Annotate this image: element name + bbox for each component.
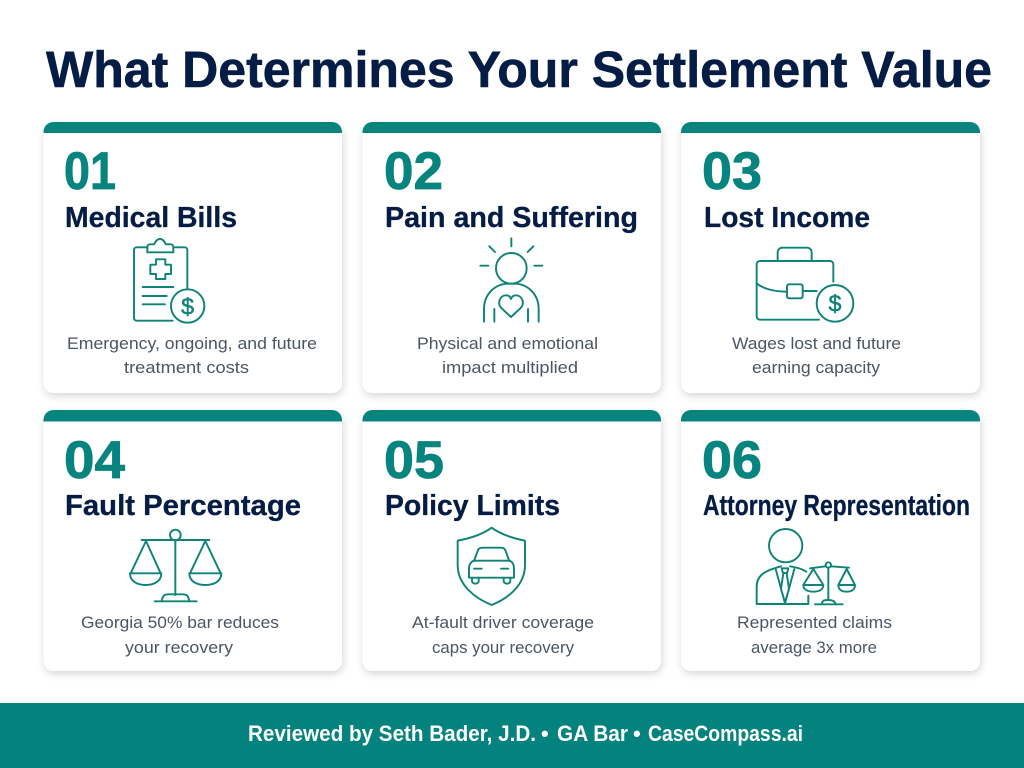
description: Emergency, ongoing, and future [67,334,317,353]
footer credit text: Reviewed by Seth Bader, J.D. [248,721,536,746]
description: your recovery [125,638,234,657]
description: Wages lost and future [732,334,901,353]
footer credit text: • [541,721,549,746]
panel: medical bills [44,122,342,393]
number 02: 02 [384,142,443,201]
icon: person with heart [480,238,542,322]
description: caps your recovery [432,638,574,657]
icon: balance scales [130,530,221,601]
icon: shield with car [458,528,525,605]
number 06: 06 [702,431,762,490]
icon: attorney with scales [757,529,855,604]
heading: fault percentage: Fault Percentage [65,490,301,522]
number 01: 01 [64,142,116,201]
number 04: 04 [64,431,126,490]
description: impact multiplied [442,358,578,377]
description: Represented claims [737,613,892,632]
panel: pain and suffering [362,122,661,393]
footer banner [0,703,1024,768]
description: At-fault driver coverage [412,613,594,632]
heading: lost income: Lost Income [704,202,870,234]
description: average 3x more [751,638,877,657]
heading: policy limits: Policy Limits [385,490,560,522]
description: Georgia 50% bar reduces [81,613,279,632]
panel: fault percentage [44,410,342,671]
description: treatment costs [124,358,249,377]
number 05: 05 [384,431,444,490]
footer credit text: CaseCompass.ai [648,721,803,746]
panel: policy limits [362,410,661,671]
heading: medical bills: Medical Bills [65,202,237,234]
heading: pain and suffering: Pain and Suffering [385,202,638,234]
panel: attorney representation [681,410,980,671]
icon: briefcase with dollar: $ [829,291,842,317]
icon: clipboard with dollar [134,239,204,323]
number 03: 03 [702,142,762,201]
description: Physical and emotional [417,334,598,353]
icon: briefcase with dollar [757,248,853,322]
icon: clipboard with dollar: $ [181,293,194,319]
description: earning capacity [752,358,881,377]
panel: lost income [681,122,980,393]
title: What Determines Your Settlement Value [46,41,992,98]
footer credit text: GA Bar [557,721,628,746]
footer credit text: • [633,721,641,746]
